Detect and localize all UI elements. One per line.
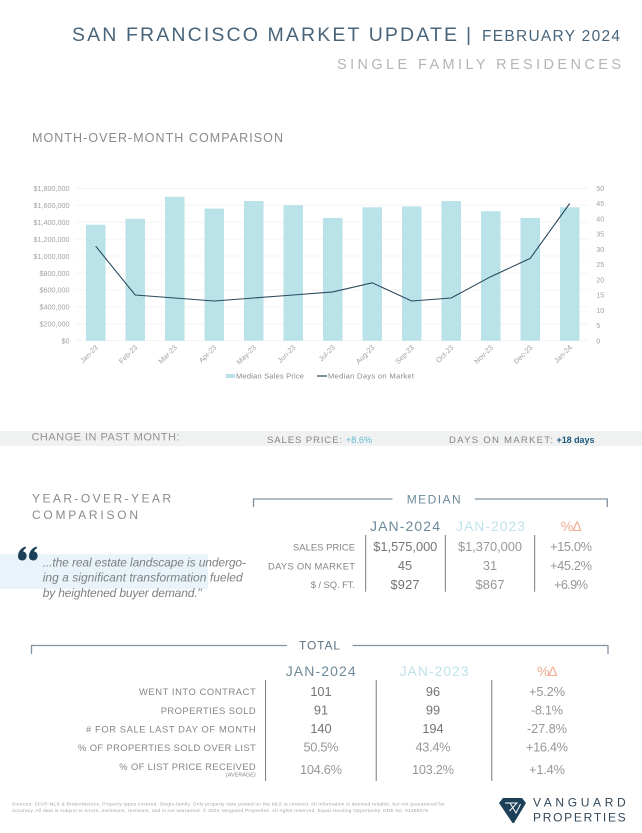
row: for sale last day of month <box>86 721 567 736</box>
legend: Median Sales Price <box>236 372 304 380</box>
heading: month-over-month comparison: MONTH-OVER-MONTH COMPARISON <box>32 131 283 145</box>
footnote: accuracy. All data is subject to errors, omissions, revisions, and is not warranted. © 2024 Vanguard Properties. All rights reserved. Equal Housing Opportunity. DRE No. 01486075 <box>12 807 428 814</box>
row: days on market: 45 <box>398 558 412 573</box>
month labels: Jan-23 <box>78 343 100 365</box>
logo: Vanguard Properties: VANGUARD <box>533 796 626 810</box>
month labels: Sep-23 <box>393 343 416 366</box>
row: properties sold <box>161 702 563 718</box>
combo chart: sales price and days on market <box>34 184 604 380</box>
row: for sale last day of month: 194 <box>422 721 444 736</box>
left axis labels: $400,000 <box>40 303 70 312</box>
row: sales price: $1,575,000 <box>373 539 437 554</box>
row: properties sold: PROPERTIES SOLD <box>161 705 256 716</box>
row: days on market: +45.2% <box>550 558 592 573</box>
band: change in past month: +8.6% <box>346 435 372 445</box>
row: percent sold over list: % OF PROPERTIES SOLD OVER LIST <box>78 742 256 753</box>
month labels: Nov-23 <box>472 343 495 366</box>
right axis labels: 5 <box>596 321 600 330</box>
row: days on market: 31 <box>483 558 497 573</box>
table: median <box>254 492 607 592</box>
column headers: %Δ <box>561 518 582 534</box>
month labels: Jun-23 <box>276 343 297 365</box>
row: price per square foot: $ / SQ. FT. <box>311 579 355 590</box>
column headers <box>286 663 558 679</box>
column headers: JAN-2023 <box>400 663 469 679</box>
row: properties sold: 99 <box>426 702 440 718</box>
band: change in past month: +18 days <box>556 435 594 445</box>
quote text <box>43 556 246 600</box>
month labels: Oct-23 <box>434 343 455 365</box>
month labels: Aug-23 <box>354 343 376 366</box>
right axis labels <box>596 184 604 346</box>
row: price per square foot: $927 <box>390 577 420 592</box>
row: percent of list price received: 104.6% <box>300 762 342 777</box>
row: percent sold over list: 50.5% <box>304 740 338 754</box>
heading: year-over-year comparison: YEAR-OVER-YEAR <box>32 492 171 506</box>
row: days on market: DAYS ON MARKET <box>268 560 355 572</box>
row: went into contract: 101 <box>310 684 332 699</box>
month labels: Dec-23 <box>512 343 534 366</box>
logo: Vanguard Properties: PROPERTIES <box>533 811 626 825</box>
row: price per square foot: $867 <box>476 577 504 592</box>
row: percent of list price received <box>119 761 565 778</box>
right axis labels: 10 <box>596 306 604 315</box>
row: properties sold: 91 <box>314 702 328 718</box>
row: for sale last day of month: -27.8% <box>527 721 567 736</box>
column headers: JAN-2024 <box>286 663 356 679</box>
bracket header: median: MEDIAN <box>407 492 461 506</box>
row: percent sold over list: +16.4% <box>526 740 568 754</box>
footnote <box>12 802 445 814</box>
row: sales price <box>293 539 592 554</box>
right axis labels: 40 <box>596 214 604 223</box>
legend <box>226 372 415 380</box>
column headers <box>370 518 582 534</box>
right axis labels: 20 <box>596 275 604 284</box>
logo: Vanguard Properties <box>499 796 626 825</box>
line: median days on market <box>96 204 570 301</box>
row: price per square foot <box>311 577 588 592</box>
row: price per square foot: +6.9% <box>554 577 588 592</box>
right axis labels: 0 <box>596 336 600 346</box>
left axis labels: $1,600,000 <box>34 201 70 210</box>
title: SAN FRANCISCO MARKET UPDATE <box>72 24 457 46</box>
quote text: by heightened buyer demand." <box>43 586 202 600</box>
left axis labels <box>34 184 70 346</box>
row: went into contract: WENT INTO CONTRACT <box>139 686 256 697</box>
bracket header: total <box>32 638 608 654</box>
band: change in past month: DAYS ON MARKET: <box>449 435 553 446</box>
band: change in past month <box>0 431 642 446</box>
left axis labels: $800,000 <box>40 269 70 278</box>
right axis labels: 30 <box>596 245 604 254</box>
row: percent of list price received: (AVERAGE) <box>226 772 256 778</box>
heading: year-over-year comparison <box>32 492 171 522</box>
bracket header: total: TOTAL <box>299 638 340 652</box>
column headers: %Δ <box>537 663 558 679</box>
right axis labels: 15 <box>596 291 604 300</box>
row: for sale last day of month: 140 <box>310 721 332 736</box>
right axis labels: 45 <box>596 199 604 208</box>
subtitle: SINGLE FAMILY RESIDENCES <box>337 57 621 73</box>
bars: median sales price <box>86 197 580 341</box>
row: days on market <box>268 558 592 573</box>
row: percent of list price received: % OF LIST PRICE RECEIVED <box>119 761 256 772</box>
row: percent of list price received: 103.2% <box>412 762 454 777</box>
month labels: May-23 <box>235 343 258 366</box>
quote text: ing a significant transformation fueled <box>43 571 243 585</box>
footnote: Sources: SFAR MLS & BrokerMetrics; Property types covered: Single-family. Only property data posted on the MLS is covered. All information is deemed reliable, but not guaranteed for <box>12 802 445 808</box>
month labels: Feb-23 <box>117 343 139 366</box>
band: change in past month: CHANGE IN PAST MONTH: <box>32 432 180 444</box>
column headers: JAN-2024 <box>370 518 440 534</box>
month labels: Jul-23 <box>317 343 337 363</box>
band: change in past month: SALES PRICE: <box>267 435 342 446</box>
legend: Median Days on Market <box>328 372 415 380</box>
row: percent sold over list <box>78 740 568 754</box>
icon: shield mark <box>499 798 526 823</box>
row: sales price: SALES PRICE <box>293 542 355 552</box>
left axis labels: $1,000,000 <box>34 252 70 261</box>
title: | <box>466 24 471 46</box>
month labels: Mar-23 <box>156 343 179 366</box>
row: percent sold over list: 43.4% <box>416 740 450 754</box>
row: sales price: $1,370,000 <box>458 539 522 554</box>
right axis labels: 50 <box>596 184 604 193</box>
pull quote <box>0 546 246 600</box>
left axis labels: $600,000 <box>40 286 70 295</box>
row: went into contract <box>139 684 565 699</box>
month labels: Apr-23 <box>197 343 218 365</box>
left axis labels: $1,800,000 <box>34 184 70 193</box>
row: properties sold: -8.1% <box>531 702 563 718</box>
icon: quotation mark <box>18 546 38 560</box>
row: for sale last day of month: # FOR SALE LAST DAY OF MONTH <box>86 724 256 734</box>
right axis labels: 25 <box>596 260 604 269</box>
left axis labels: $0 <box>62 336 70 346</box>
right axis labels: 35 <box>596 230 604 239</box>
column headers: JAN-2023 <box>456 518 525 534</box>
month labels: Jan-24 <box>552 343 574 365</box>
left axis labels: $1,200,000 <box>34 235 70 244</box>
title: FEBRUARY 2024 <box>482 28 620 45</box>
left axis labels: $200,000 <box>40 320 70 329</box>
table: total <box>32 638 608 781</box>
bracket header: median <box>254 492 607 507</box>
heading: year-over-year comparison: COMPARISON <box>32 508 138 522</box>
month labels <box>78 343 574 366</box>
row: sales price: +15.0% <box>550 539 592 554</box>
row: percent of list price received: +1.4% <box>529 762 565 777</box>
left axis labels: $1,400,000 <box>34 218 70 227</box>
row: went into contract: +5.2% <box>529 684 565 699</box>
row: went into contract: 96 <box>426 684 440 699</box>
quote text: ...the real estate landscape is undergo- <box>43 556 246 570</box>
